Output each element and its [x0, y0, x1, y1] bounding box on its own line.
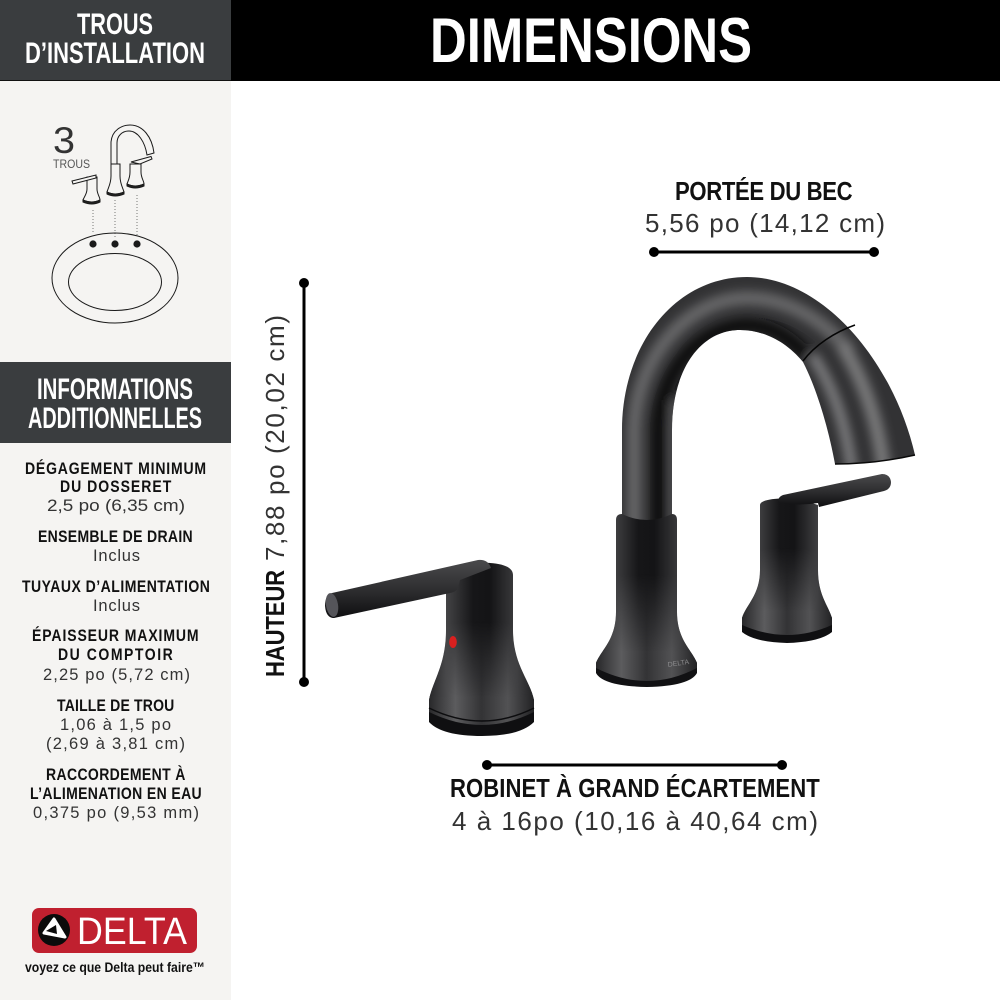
spec: supply lines [22, 578, 210, 615]
right lever [779, 474, 891, 507]
left lever [325, 560, 491, 618]
height label: HAUTEUR [261, 570, 290, 677]
spec: backsplash clearance: DÉGAGEMENT MINIMUM [25, 460, 206, 478]
numeral 3: 3 [53, 120, 75, 161]
basin [52, 233, 178, 323]
spec: hole size: TAILLE DE TROU [57, 697, 174, 715]
right handle [742, 474, 891, 643]
spec: hole size: 1,06 à 1,5 po [60, 716, 171, 734]
arrow: spout reach measure [649, 247, 879, 257]
spec: deck thickness: 2,25 po (5,72 cm) [43, 666, 190, 684]
header: mounting holes [0, 0, 231, 81]
spec: drain assembly [38, 528, 193, 565]
left handle [324, 560, 534, 736]
spec: backsplash clearance [25, 460, 206, 515]
heading band: additional information: INFORMATIONS [37, 373, 193, 406]
spec: water connection: RACCORDEMENT À [46, 766, 185, 784]
mini faucet [72, 125, 154, 204]
delta logo: DELTA [77, 911, 188, 953]
spec: water connection: 0,375 po (9,53 mm) [33, 804, 199, 822]
pull-down seam [803, 325, 855, 361]
header: mounting holes: D’INSTALLATION [25, 37, 205, 70]
spec: backsplash clearance: 2,5 po (6,35 cm) [47, 497, 185, 515]
heading band: additional information: ADDITIONNELLES [28, 402, 202, 435]
spec: deck thickness: ÉPAISSEUR MAXIMUM [32, 627, 199, 645]
header: dimensions: DIMENSIONS [430, 6, 752, 76]
dimension: spout reach: PORTÉE DU BEC [675, 176, 853, 206]
mini right handle [127, 164, 144, 186]
dimension: spout reach: 5,56 po (14,12 cm) [645, 208, 885, 238]
red hot indicator [449, 636, 457, 648]
spec: supply lines: Inclus [93, 597, 140, 615]
arrow: spread measure [482, 760, 787, 770]
header: mounting holes: TROUS [77, 8, 153, 41]
spec: supply lines: TUYAUX D’ALIMENTATION [22, 578, 210, 596]
header: dimensions [231, 0, 1000, 81]
dimension: widespread [450, 760, 820, 836]
faucet product image [324, 277, 915, 736]
label trous: TROUS [53, 157, 90, 171]
spec: drain assembly: ENSEMBLE DE DRAIN [38, 528, 193, 546]
faucet spout [622, 277, 915, 530]
spec: deck thickness [32, 627, 199, 684]
spec list [22, 460, 210, 822]
sidebar background [0, 0, 231, 1000]
dotted guides [93, 195, 137, 238]
heading band: additional information [0, 362, 231, 443]
icon: delta emblem [38, 914, 70, 946]
spec: hole size: (2,69 à 3,81 cm) [46, 735, 185, 753]
dimension: widespread: 4 à 16po (10,16 à 40,64 cm) [452, 806, 818, 836]
arrow: height measure [299, 278, 309, 687]
delta logo: voyez ce que Delta peut faire™ [25, 959, 205, 975]
icon: three hole sink diagram [52, 120, 178, 323]
spec: backsplash clearance: DU DOSSERET [60, 478, 172, 496]
dimension: widespread: ROBINET À GRAND ÉCARTEMENT [450, 773, 820, 803]
spec: deck thickness: DU COMPTOIR [58, 646, 173, 664]
holes [89, 240, 141, 248]
delta logo [25, 908, 205, 975]
spec: drain assembly: Inclus [93, 547, 140, 565]
faucet base: DELTA [667, 659, 690, 669]
height label: 7,88 po (20,02 cm) [260, 315, 290, 561]
height label [260, 315, 290, 677]
dimension: spout reach [645, 176, 885, 257]
dimension: height [260, 278, 309, 687]
spec: hole size [46, 697, 185, 753]
spec: water connection [30, 766, 202, 822]
faucet base [596, 514, 697, 687]
spec: water connection: L’ALIMENATION EN EAU [30, 785, 202, 803]
mini left handle [83, 177, 100, 202]
